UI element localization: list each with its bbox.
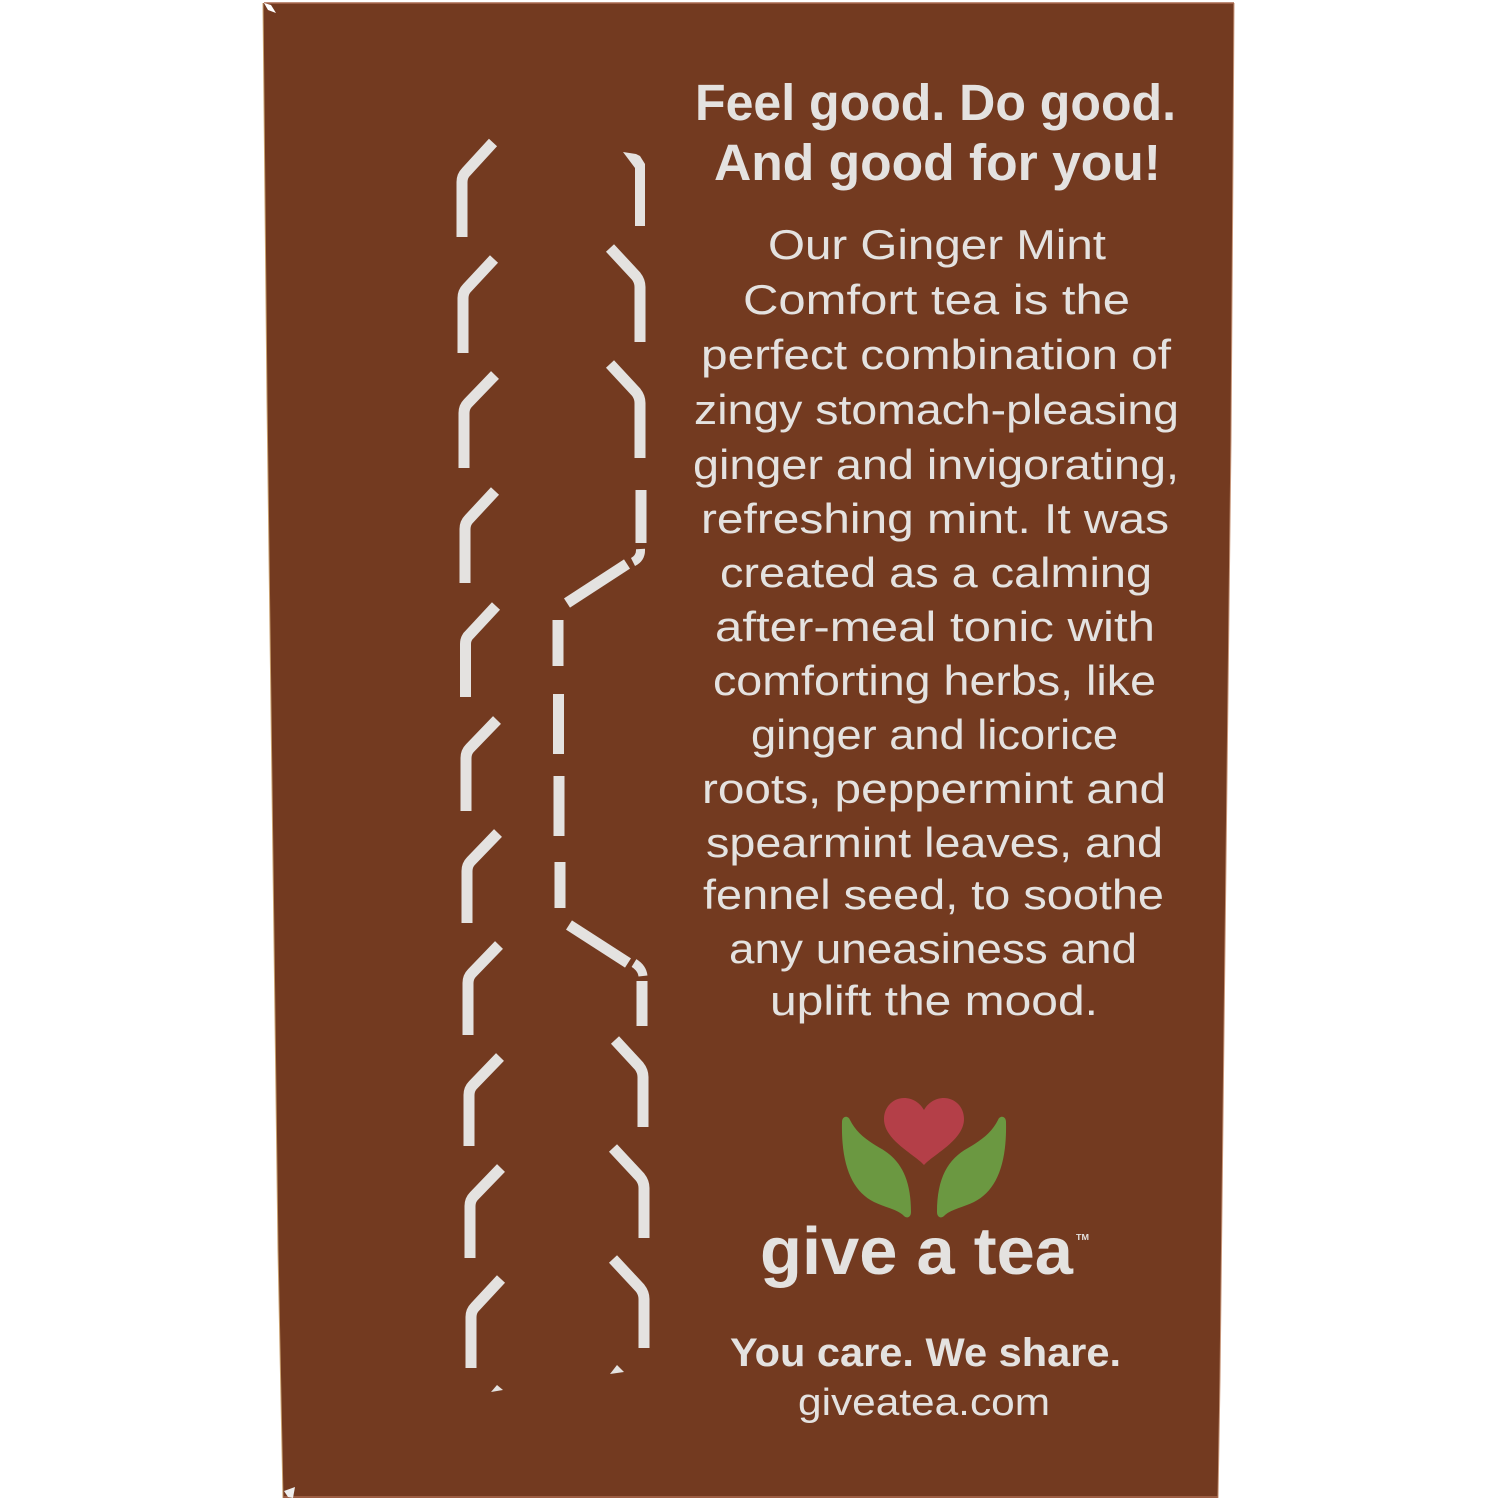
right dashes upper (610, 152, 645, 543)
panel: brown tea box back (263, 3, 1234, 1498)
neck connector upper (567, 549, 641, 603)
text block: description: any uneasiness and (729, 925, 1137, 972)
heading: And good for you! (714, 134, 1161, 191)
text block: description: fennel seed, to soothe (703, 871, 1164, 918)
text block: description: uplift the mood. (770, 977, 1098, 1024)
text block: description: refreshing mint. It was (701, 495, 1169, 542)
text block: description: spearmint leaves, and (706, 819, 1163, 866)
logo wordmark: give a tea (760, 1214, 1074, 1289)
neck connector lower (569, 925, 643, 976)
text block: description: ginger and licorice (751, 711, 1118, 758)
text block: description: comforting herbs, like (713, 657, 1156, 704)
heading: Feel good. Do good. (695, 74, 1176, 131)
text block: description: ginger and invigorating, (693, 441, 1179, 488)
text block: description: created as a calming (720, 549, 1152, 596)
text block: description: Comfort tea is the (743, 276, 1130, 323)
text block: description: after-meal tonic with (715, 603, 1155, 650)
logo wordmark: TM (1076, 1233, 1089, 1242)
website: giveatea.com (798, 1382, 1050, 1424)
center stem dashes (558, 620, 560, 908)
text block: description: roots, peppermint and (702, 765, 1166, 812)
text block: description: perfect combination of (701, 331, 1171, 378)
small triangle marks (491, 1365, 624, 1392)
heading (695, 74, 1176, 191)
tagline: You care. We share. (730, 1331, 1121, 1375)
right dashes lower (613, 981, 644, 1348)
icon: give a tea logo, heart and leaves (842, 1098, 1006, 1217)
cut-out: tea bag dashed outline (462, 142, 645, 1392)
text block: description: Our Ginger Mint (768, 221, 1106, 268)
left dashes (462, 142, 501, 1368)
text block: description: zingy stomach-pleasing (694, 386, 1179, 433)
text block: description (693, 221, 1179, 1024)
